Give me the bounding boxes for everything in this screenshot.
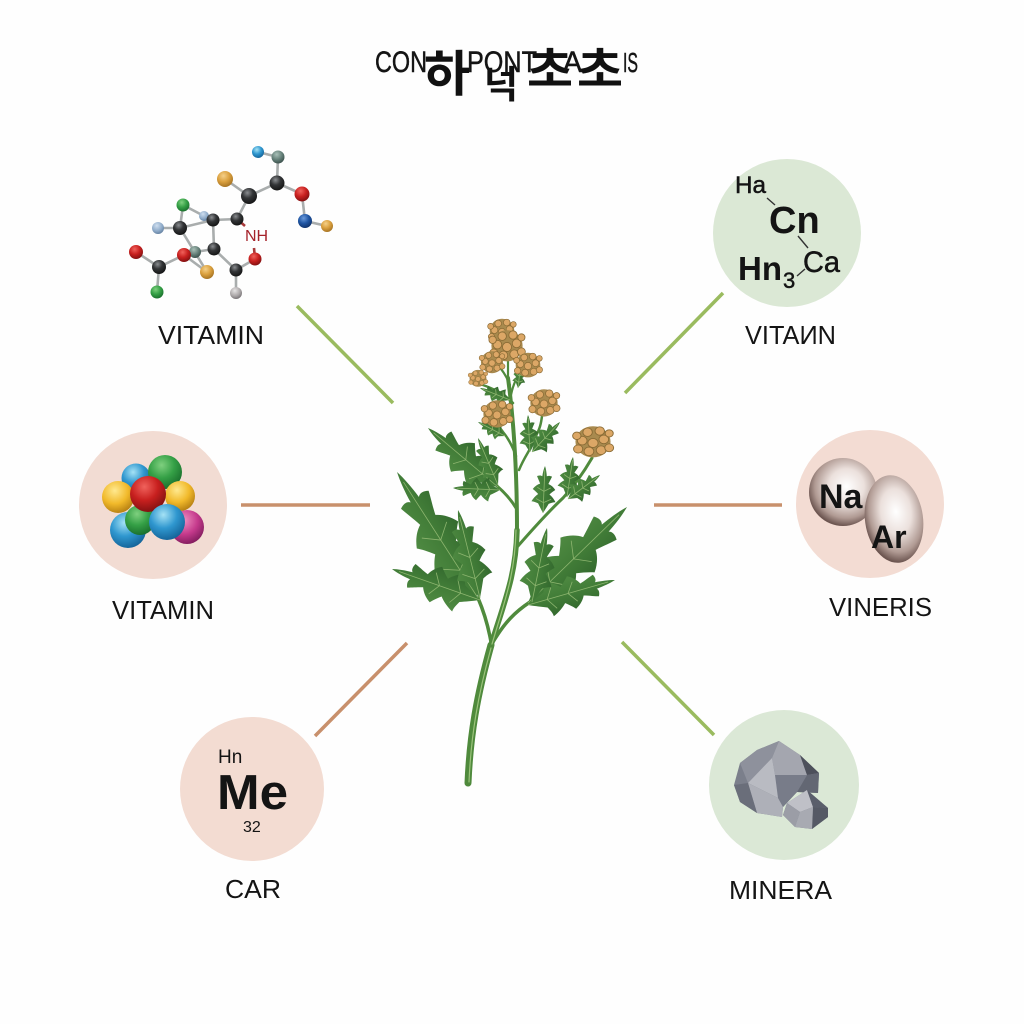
title: IS xyxy=(623,47,638,78)
molecule atoms xyxy=(129,146,333,299)
label: middle right: VINERIS xyxy=(829,592,932,622)
panel: molecule vitamin xyxy=(129,146,333,299)
connector: middle right xyxy=(654,503,782,507)
connector: middle left xyxy=(241,503,370,507)
formula text: 3 xyxy=(783,268,795,293)
label: bottom left: CAR xyxy=(225,874,281,904)
formula bonds xyxy=(767,198,808,276)
icon: Na sphere: Na xyxy=(819,478,864,516)
icon: Na sphere xyxy=(809,458,877,526)
connector: bottom right xyxy=(622,642,714,735)
title: PONT xyxy=(467,46,537,79)
label: top left vitamin: VITAMIN xyxy=(158,320,264,350)
panel: coloured spheres circle xyxy=(79,431,227,579)
panel: formula circle top right xyxy=(713,159,861,307)
label: bottom right: MINERA xyxy=(729,875,833,905)
panel: mineral circle xyxy=(709,710,859,860)
label: top right vitamin: VITAИN xyxy=(745,320,836,350)
element text: Me xyxy=(217,766,288,820)
icon: Ar sphere: Ar xyxy=(871,519,907,555)
title: 하 xyxy=(424,48,470,102)
element text xyxy=(217,747,288,836)
title: 초 xyxy=(527,44,573,96)
panel: element circle bottom left xyxy=(180,717,324,861)
formula text xyxy=(735,172,840,293)
formula text: Hn xyxy=(738,250,782,287)
plant flower clusters xyxy=(468,319,614,457)
plant stems xyxy=(468,352,592,783)
connector: bottom left xyxy=(315,643,407,736)
central plant illustration xyxy=(375,319,645,783)
panel: Na Ar circle xyxy=(796,430,944,578)
connector: top left xyxy=(297,306,393,403)
connector: top right xyxy=(625,293,723,393)
formula text: Ha xyxy=(735,172,767,199)
title: 초 xyxy=(577,44,623,96)
molecule NH label: NH xyxy=(245,228,268,245)
formula text: Cn xyxy=(769,200,820,242)
icon: large crystal xyxy=(734,741,819,817)
plant leaves xyxy=(375,361,645,622)
element text: 32 xyxy=(243,819,261,836)
icon: Ar sphere xyxy=(859,471,929,567)
element text: Hn xyxy=(218,747,242,768)
title: A xyxy=(563,46,582,79)
title xyxy=(375,44,638,107)
icon: sphere cluster xyxy=(102,455,204,548)
title: CON xyxy=(375,46,427,79)
label: middle left vitamin: VITAMIN xyxy=(112,595,214,625)
icon: small crystal xyxy=(783,790,828,829)
molecule bonds xyxy=(136,152,327,293)
title: 넉 xyxy=(484,65,518,107)
formula text: Ca xyxy=(803,246,840,279)
